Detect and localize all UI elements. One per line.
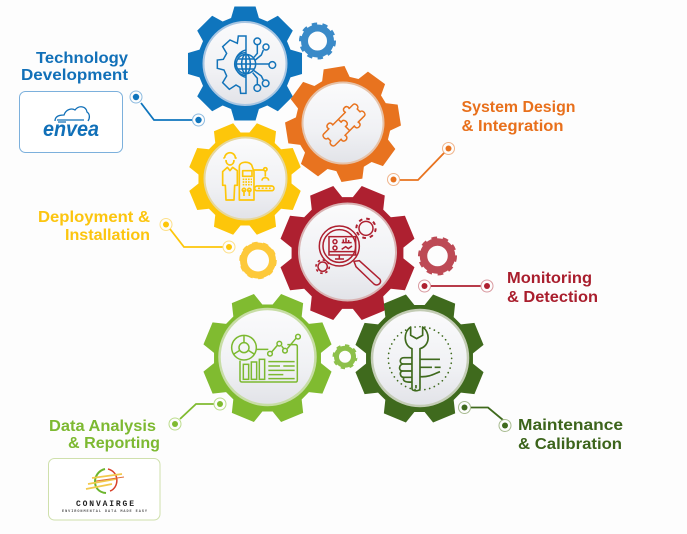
connector: data analysis <box>169 398 226 430</box>
heading: maintenance: Maintenance <box>518 417 623 434</box>
heading: monitoring: Monitoring <box>507 270 592 287</box>
heading: deployment <box>38 209 150 244</box>
icon: dashboard charts <box>232 334 300 382</box>
small gear: yellow <box>241 244 275 278</box>
gear: monitoring <box>260 165 435 341</box>
icon: magnifier over monitor <box>316 219 380 285</box>
heading: technology development: Technology <box>36 50 128 67</box>
connector: system design <box>388 142 454 186</box>
icon: hand holding wrench <box>388 327 452 391</box>
logo box: convairge <box>48 458 160 520</box>
logo tagline: ENVIRONMENTAL DATA MADE EASY <box>62 510 148 514</box>
heading: system design: & Integration <box>462 118 564 135</box>
heading: maintenance: & Calibration <box>518 436 622 453</box>
small gear: blue <box>301 24 334 58</box>
icon: worker and machine <box>223 153 274 200</box>
connector: technology development <box>130 91 204 126</box>
icon: convairge emblem <box>86 469 124 493</box>
heading: data analysis <box>49 418 160 452</box>
gear: data analysis <box>183 274 352 442</box>
heading: monitoring <box>507 270 598 306</box>
gear: technology development <box>188 6 302 121</box>
heading: system design: System Design <box>462 99 576 116</box>
small gear: red <box>420 238 455 274</box>
heading: monitoring: & Detection <box>507 289 598 306</box>
logo box: envea <box>20 92 122 152</box>
small gear: green <box>334 346 356 368</box>
connector: maintenance <box>458 402 511 432</box>
gear: deployment <box>172 106 318 252</box>
heading: maintenance <box>518 417 623 453</box>
connector: deployment <box>160 218 235 253</box>
logo text: envea: envea <box>43 118 99 141</box>
heading: technology development <box>21 50 129 84</box>
icon: circuit gear and globe <box>217 36 276 93</box>
icon: puzzle pieces <box>319 100 369 150</box>
heading: deployment: Deployment & <box>38 209 150 226</box>
heading: data analysis: & Reporting <box>68 435 160 452</box>
gear: maintenance <box>335 274 504 443</box>
connector: monitoring <box>418 280 493 292</box>
heading: system design <box>462 99 576 135</box>
heading: deployment: Installation <box>65 227 150 244</box>
heading: technology development: Development <box>21 67 129 84</box>
icon: envea cloud <box>55 107 89 122</box>
logo text: convairge: CONVAIRGE <box>76 500 134 509</box>
heading: data analysis: Data Analysis <box>49 418 156 435</box>
gear: system design <box>278 59 408 189</box>
